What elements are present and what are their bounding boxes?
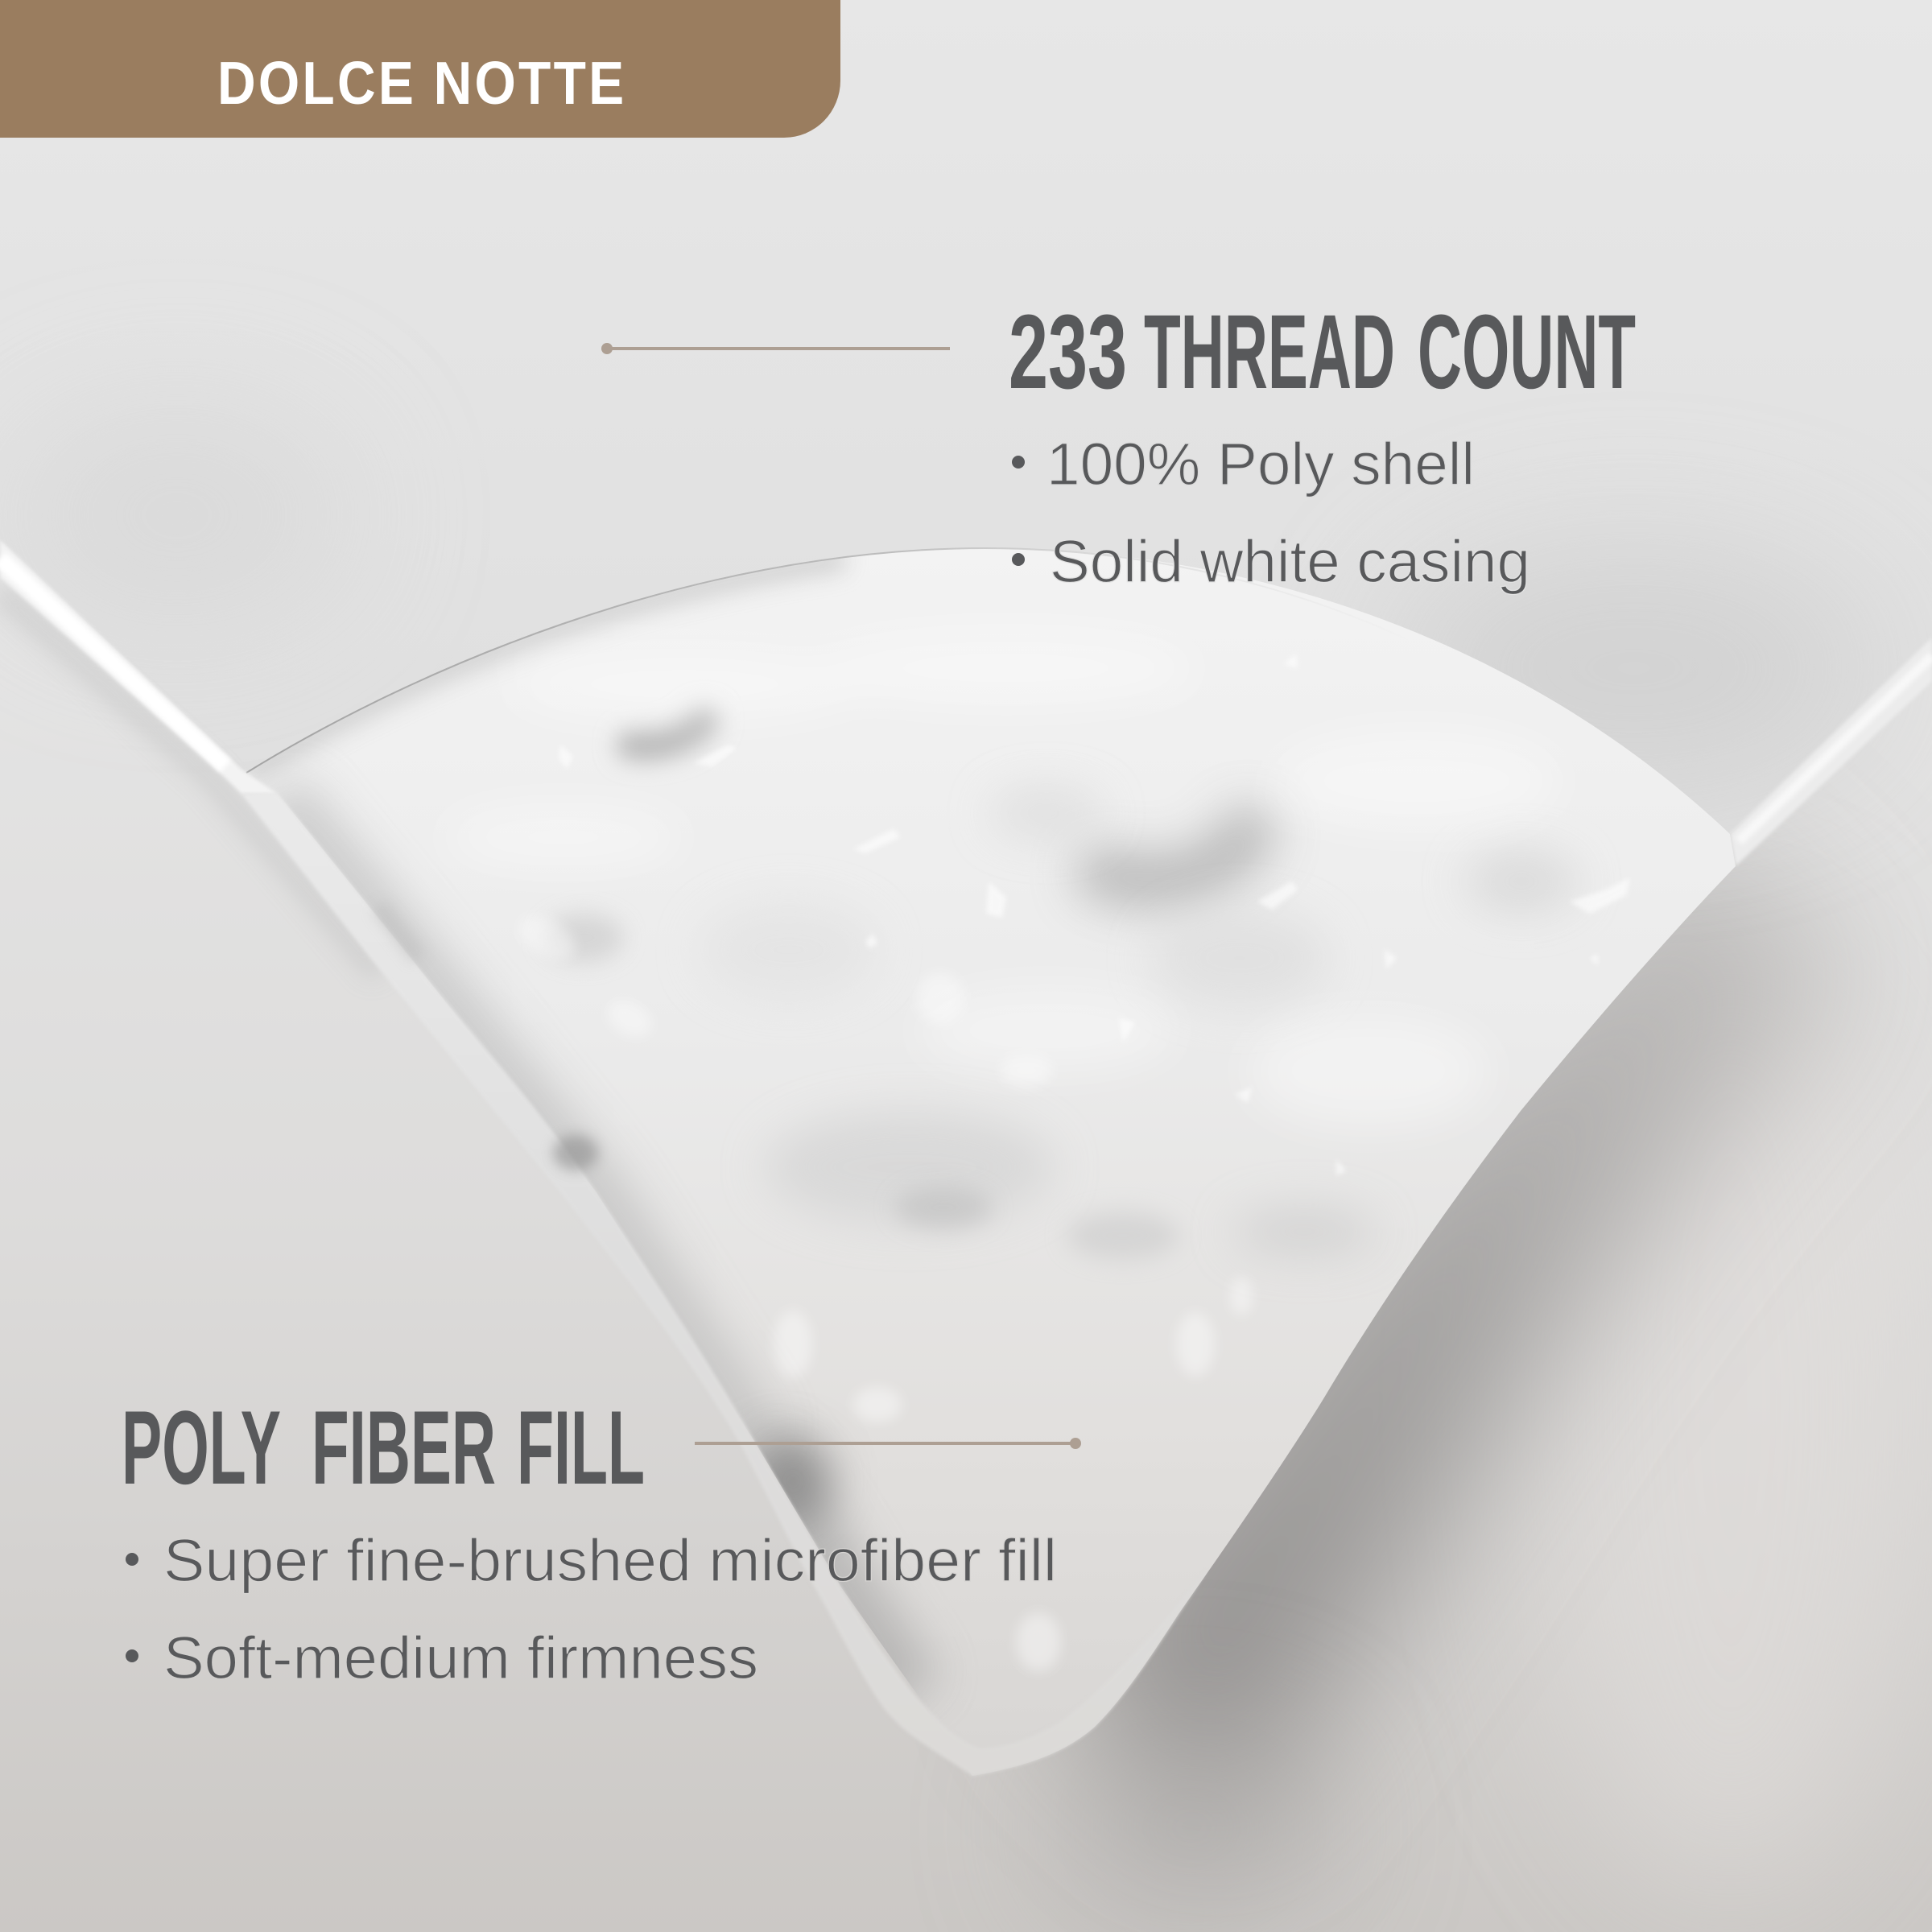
bullet: poly shell: 100% Poly shell: [1046, 431, 1475, 497]
seam: lower left and tip: [242, 794, 1208, 1776]
heading: thread count: 233: [1009, 292, 1127, 411]
seam: upper right: [1730, 638, 1932, 866]
upper pillow panel: [0, 0, 1932, 834]
seam: upper left: [0, 540, 278, 794]
heading: fiber fill: POLY: [122, 1389, 281, 1506]
heading: fiber fill: FIBER: [312, 1389, 496, 1506]
fiber fill window: [204, 314, 1736, 1764]
bullet: white casing: Solid white casing: [1050, 528, 1530, 595]
callout: thread count leader line: [601, 343, 950, 354]
fill highlights: [562, 748, 1627, 1174]
bullet: firmness: Soft-medium firmness: [163, 1624, 758, 1691]
heading: thread count: COUNT: [1418, 292, 1636, 411]
fill shadows: [246, 559, 1578, 1695]
heading: fiber fill: FILL: [517, 1389, 645, 1506]
pillow seam piping: [0, 540, 1932, 1776]
callout: 233 thread count: [1009, 292, 1636, 595]
brand banner: [0, 0, 840, 138]
brand name: DOLCE NOTTE: [217, 49, 624, 117]
fill window top edge: [246, 548, 1409, 773]
heading: thread count: THREAD: [1144, 292, 1395, 411]
callout: poly fiber fill: [122, 1389, 1057, 1691]
heading: fiber fill: [122, 1389, 645, 1506]
callout: fiber fill leader line: [695, 1438, 1081, 1449]
bullet: microfiber: Super fine-brushed microfiber fill: [163, 1527, 1057, 1594]
